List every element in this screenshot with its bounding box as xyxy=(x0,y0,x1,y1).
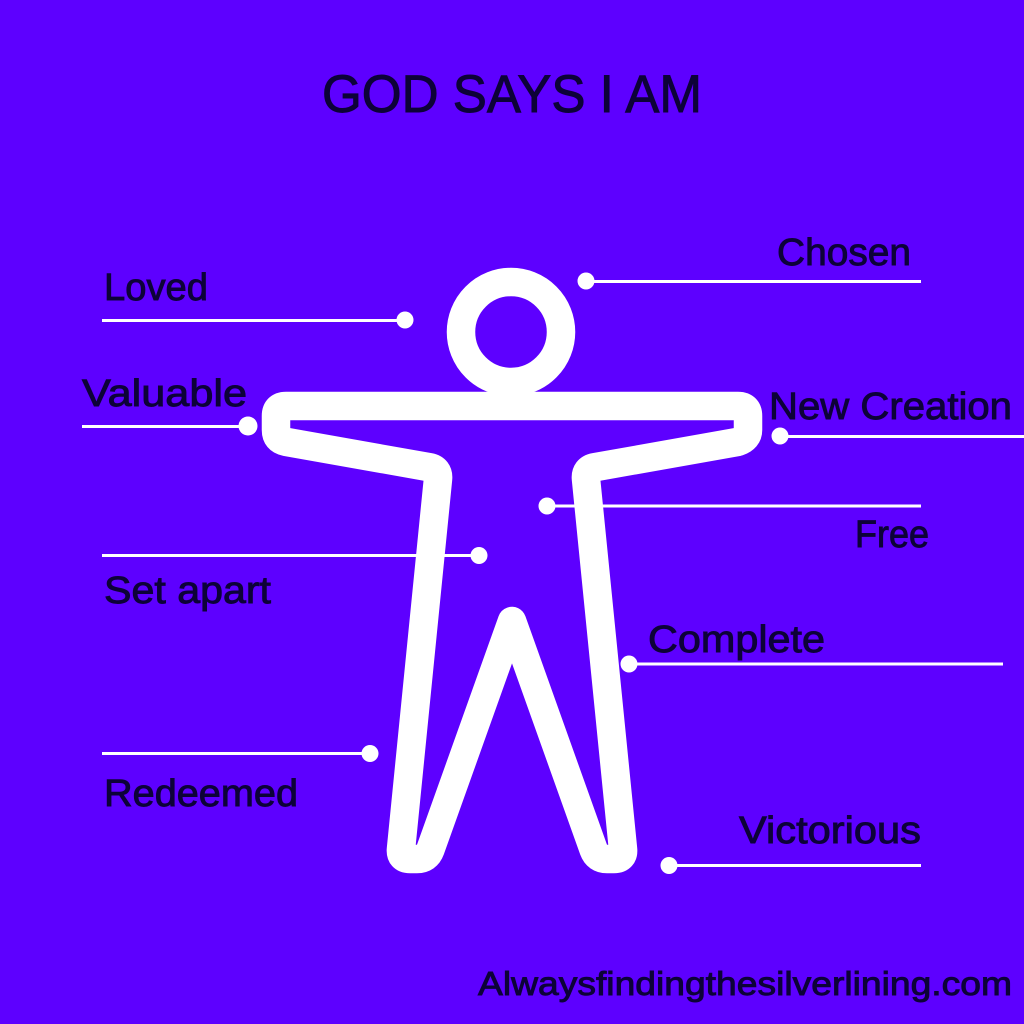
title: GOD SAYS I AM xyxy=(322,65,702,124)
label: Victorious: Victorious xyxy=(739,810,921,852)
label: Set apart xyxy=(102,547,488,612)
label: Chosen: Chosen xyxy=(777,232,911,274)
label: Free xyxy=(538,498,929,556)
label: New Creation xyxy=(769,386,1024,444)
figure outline xyxy=(276,282,748,859)
label: Valuable xyxy=(82,373,258,436)
label: Valuable: Valuable xyxy=(82,373,247,415)
label: Redeemed xyxy=(102,745,378,815)
label: Complete: Complete xyxy=(648,619,825,661)
footer website: Alwaysfindingthesilverlining.com xyxy=(478,965,1012,1002)
label: Redeemed: Redeemed xyxy=(104,773,298,815)
figure body xyxy=(276,406,748,859)
label: Loved: Loved xyxy=(104,267,208,309)
label: Victorious xyxy=(660,810,921,874)
figure head xyxy=(461,282,561,382)
label: Complete xyxy=(620,619,1003,672)
label: Free: Free xyxy=(855,514,929,556)
label: Chosen xyxy=(578,232,921,290)
label: New Creation: New Creation xyxy=(769,386,1012,428)
label: Loved xyxy=(102,267,414,328)
label: Set apart: Set apart xyxy=(104,570,271,612)
